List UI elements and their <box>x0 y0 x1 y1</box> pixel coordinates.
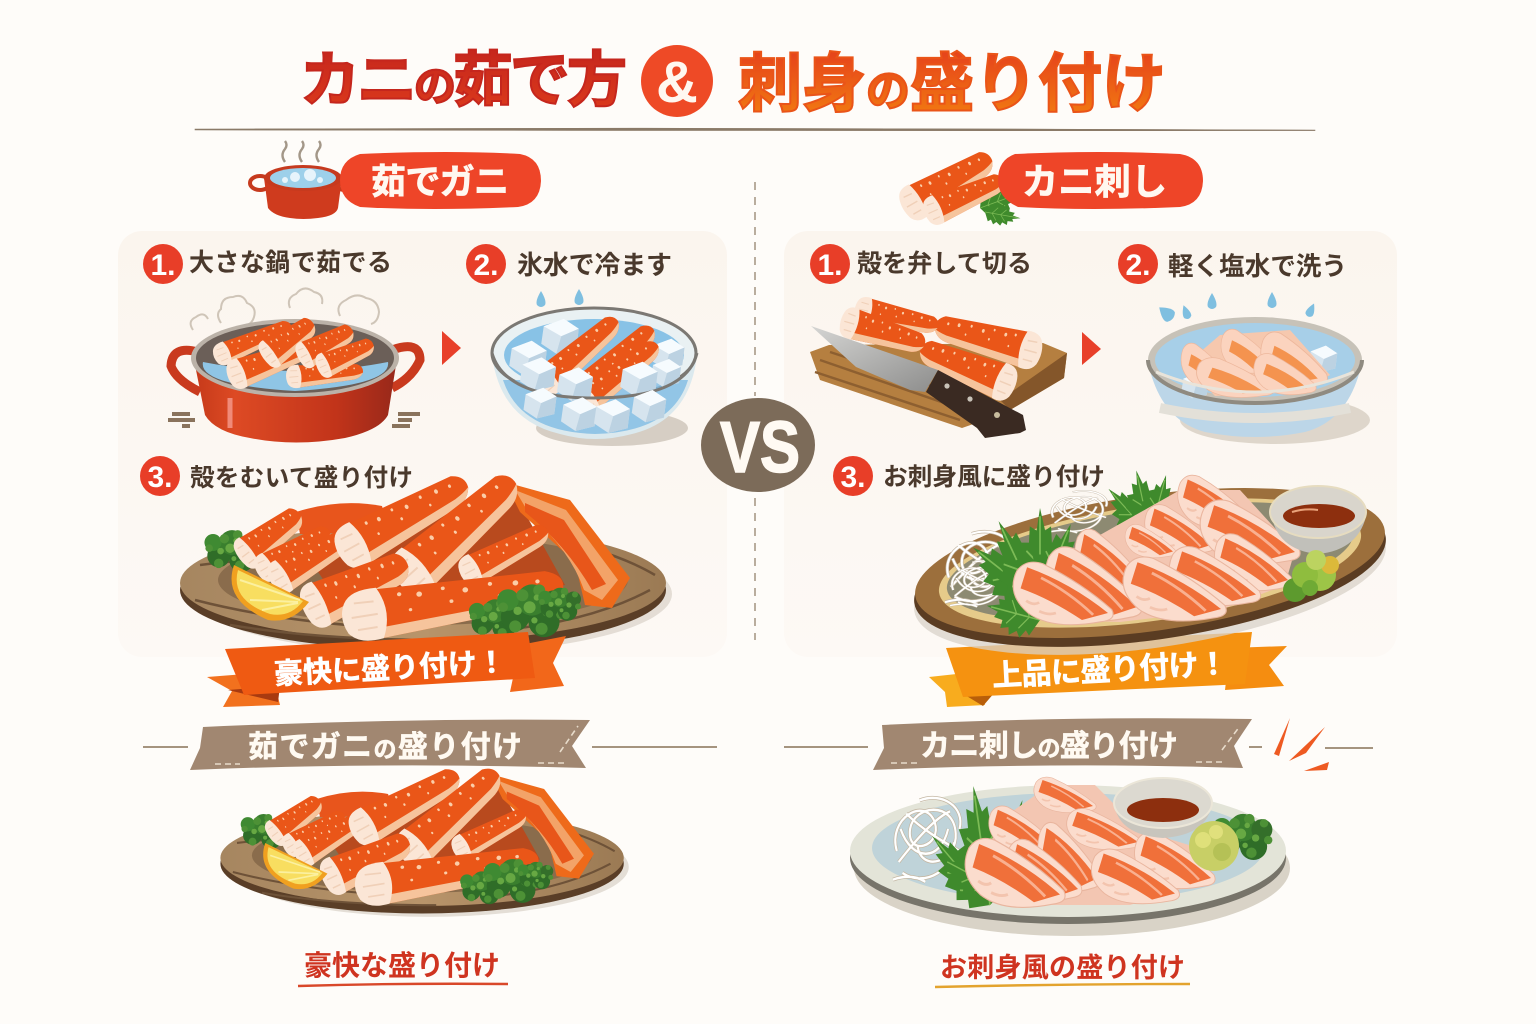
icon: crab legs <box>894 142 1024 229</box>
illustration: wooden plate with crab sashimi <box>905 463 1395 680</box>
panel: boiled crab background <box>118 231 727 657</box>
step 1 label: boil: 1. <box>150 249 176 282</box>
heading: crab sashimi <box>894 142 1203 229</box>
illustration: wash bowl with crab meat <box>1148 292 1370 444</box>
ribbon: elegant plating: 上品に盛り付け！ <box>991 648 1229 693</box>
pill heading: 茹でガニ <box>371 163 509 202</box>
step 3 label: plate: 3. <box>147 461 173 494</box>
illustration: knife and crab on cutting board <box>810 295 1067 438</box>
step 2 label: ice water: 氷水で冷ます <box>517 250 672 280</box>
step 1 label: cut: 殻を弁して切る <box>857 250 1032 278</box>
caption: hearty plating: 豪快な盛り付け <box>304 950 500 981</box>
step 3 label: sashimi plate <box>833 456 1105 496</box>
step 2 label: ice water: 2. <box>473 249 499 282</box>
illustration: bottom wooden plate with crab legs <box>220 757 629 917</box>
ribbon heading: sashimi plating <box>784 718 1373 770</box>
step 2 label: ice water <box>466 244 672 284</box>
heading: boiled crab <box>250 141 541 219</box>
ribbon heading: boiled crab plating <box>143 720 717 770</box>
step 1 label: boil: 大さな鍋で茹でる <box>189 249 392 277</box>
title right: sashimi plating: 刺身の盛り付け <box>738 48 1166 120</box>
pill heading <box>340 152 541 209</box>
wasabi mound <box>1283 550 1339 602</box>
ampersand badge <box>641 45 713 117</box>
ampersand badge: & <box>656 50 698 115</box>
step 3 label: sashimi plate: 3. <box>840 461 866 494</box>
ribbon heading: sashimi plating: カニ刺しの盛り付け <box>920 730 1178 763</box>
arrow <box>442 331 461 365</box>
step 3 label: sashimi plate: お刺身風に盛り付け <box>883 463 1105 491</box>
ribbon: hearty plating <box>207 632 566 707</box>
title left: crab boiling: カニの茹で方 <box>300 47 627 114</box>
wasabi mound <box>1189 821 1239 871</box>
illustration: ice bowl <box>492 289 697 446</box>
illustration: wooden plate with crab legs <box>180 462 672 654</box>
title <box>300 45 1166 120</box>
step 1 label: boil <box>143 244 392 284</box>
caption: sashimi style plating: お刺身風の盛り付け <box>940 953 1185 983</box>
pill heading: カニ刺し <box>1022 161 1167 202</box>
ribbon: elegant plating <box>929 632 1287 707</box>
pill heading <box>998 152 1203 209</box>
panel: crab sashimi background <box>784 231 1397 657</box>
ribbon: hearty plating: 豪快に盛り付け！ <box>273 646 507 691</box>
icon: small red pot <box>250 141 355 219</box>
step 2 label: wash: 2. <box>1125 249 1151 282</box>
step 1 label: cut: 1. <box>817 249 843 282</box>
ribbon heading: boiled crab plating: 茹でガニの盛り付け <box>248 731 522 764</box>
icon: orange sparks <box>1274 718 1329 771</box>
icon: steam <box>191 288 379 330</box>
dipping sauce dish <box>1270 486 1367 554</box>
step 1 label: cut <box>810 244 1032 284</box>
step 2 label: wash: 軽く塩水で洗う <box>1168 253 1347 281</box>
VS badge: VS <box>720 408 800 488</box>
step 3 label: plate <box>140 456 413 496</box>
dipping sauce dish <box>1114 778 1212 838</box>
arrow <box>1082 332 1101 365</box>
illustration: bottom ceramic plate with crab sashimi <box>850 777 1290 936</box>
illustration: red pot with crab <box>168 310 420 442</box>
step 3 label: plate: 殻をむいて盛り付け <box>190 464 413 492</box>
step 2 label: wash <box>1118 244 1347 284</box>
